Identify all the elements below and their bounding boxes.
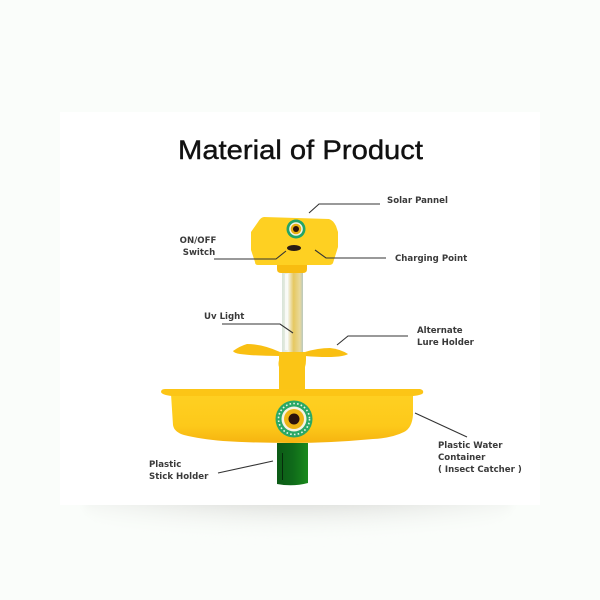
stick holder xyxy=(277,443,308,485)
title: Material of Product xyxy=(178,135,424,165)
white panel xyxy=(60,112,540,505)
panel shadow xyxy=(84,458,512,550)
stem xyxy=(278,352,306,389)
label: charging point: Charging Point xyxy=(395,254,467,264)
product illustration xyxy=(161,217,423,485)
water container bowl xyxy=(171,394,413,443)
lure holder leaves xyxy=(233,344,348,357)
label: plastic water container: ( Insect Catcher ) xyxy=(438,465,522,475)
head badge xyxy=(286,220,306,238)
bowl rim xyxy=(161,389,423,396)
bowl badge xyxy=(276,400,312,438)
label: plastic stick holder: Plastic xyxy=(149,460,181,470)
label: solar pannel: Solar Pannel xyxy=(387,196,448,206)
label: on/off switch: Switch xyxy=(183,248,215,258)
label: uv light: Uv Light xyxy=(204,312,244,322)
label: alternate lure holder: Lure Holder xyxy=(417,338,475,348)
solar panel head xyxy=(251,217,338,265)
label: on/off switch: ON/OFF xyxy=(180,236,216,246)
label: plastic water container: Container xyxy=(438,453,486,463)
uv light tube xyxy=(282,270,303,354)
leader lines xyxy=(214,204,467,473)
label: plastic water container: Plastic Water xyxy=(438,441,503,451)
label: plastic stick holder: Stick Holder xyxy=(149,472,209,482)
label: alternate lure holder: Alternate xyxy=(417,326,463,336)
neck xyxy=(277,262,307,273)
switch xyxy=(287,245,301,251)
